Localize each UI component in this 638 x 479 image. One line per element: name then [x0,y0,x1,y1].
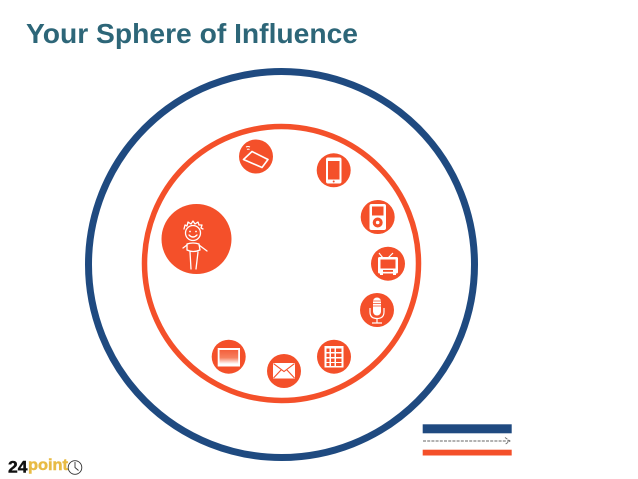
logo: 24point: 24 [8,459,28,477]
icon: spreadsheet [317,340,351,374]
legend: dashed arrow [423,438,510,444]
legend [423,424,512,456]
icon: tablet [239,140,273,174]
icon: person [162,204,232,274]
icon: laptop [212,340,246,374]
inner circle: sphere of control [144,126,418,400]
logo: 24point: point [28,457,68,474]
icon: envelope [267,354,301,388]
title: Your Sphere of Influence [26,18,358,49]
outer circle: sphere of influence [88,72,474,458]
legend: orange bar [423,450,512,456]
icon: microphone [360,293,394,327]
icon: music player [361,200,395,234]
icon: television [371,247,405,281]
icon: smartphone [317,153,351,187]
logo: 24point [8,457,82,477]
legend: blue bar [423,424,512,433]
